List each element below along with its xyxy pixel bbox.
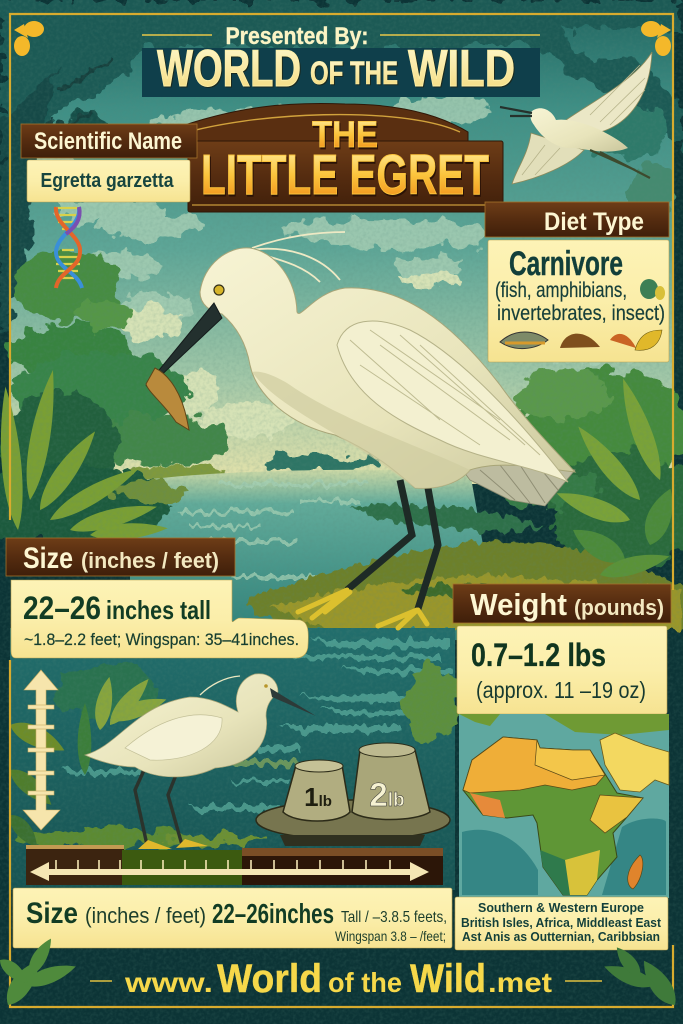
feet xyxy=(298,590,427,628)
icon: frog xyxy=(640,279,665,300)
lower leaves xyxy=(4,674,169,852)
left forest xyxy=(0,249,380,510)
scientific name panel: Egretta garzetta xyxy=(40,170,174,192)
river ripples xyxy=(170,482,370,579)
range map xyxy=(459,714,669,898)
diet panel: Diet Type xyxy=(544,208,644,236)
footer website: www. xyxy=(124,967,213,998)
diet panel: (fish, amphibians, xyxy=(495,279,627,302)
Africa xyxy=(463,737,643,895)
crest plumes xyxy=(248,232,345,282)
bottom size panel: Wingspan 3.8 – /feet; xyxy=(335,928,446,944)
flying egret xyxy=(500,52,652,184)
tail feathers xyxy=(480,465,558,503)
diet panel: Carnivore xyxy=(509,245,623,283)
beak xyxy=(146,303,222,386)
bottom size panel: Size xyxy=(26,897,78,930)
near shore foliage xyxy=(0,463,190,547)
region caption: British Isles, Africa, Middleast East xyxy=(461,915,662,930)
icon: frog on ground xyxy=(560,334,600,348)
diet panel xyxy=(485,202,669,362)
water bands xyxy=(60,640,450,811)
lower water xyxy=(10,628,455,890)
wing feathers xyxy=(350,330,540,455)
legs xyxy=(347,480,438,612)
body and neck xyxy=(200,248,575,488)
size panel: inches tall xyxy=(106,595,211,625)
footer leaves left xyxy=(0,935,78,1010)
region caption: Ast Anis as Outternian, Caribbsian xyxy=(462,929,660,944)
region caption: Southern & Western Europe xyxy=(478,900,644,915)
icon: fish xyxy=(500,332,548,349)
header: WILD xyxy=(408,40,515,98)
bottom size panel xyxy=(13,888,452,948)
icon: height arrow xyxy=(23,670,60,830)
lower foliage xyxy=(15,664,458,848)
header: Presented By: xyxy=(226,23,368,50)
size panel: ~1.8–2.2 feet; Wingspan: 35–41inches. xyxy=(24,630,299,649)
river xyxy=(130,470,500,640)
weight panel: (pounds) xyxy=(574,595,664,620)
right bushes xyxy=(500,370,683,570)
title sign: THE xyxy=(312,114,378,155)
weight panel: Weight xyxy=(470,587,567,622)
footer website: Wild xyxy=(410,957,486,1001)
corner ornament right xyxy=(641,21,671,56)
Madagascar xyxy=(628,855,643,889)
size panel: (inches / feet) xyxy=(81,548,219,573)
header: OF THE xyxy=(310,55,398,91)
size panel xyxy=(6,538,308,658)
fish xyxy=(146,368,189,430)
wing xyxy=(337,321,568,482)
top dark forest xyxy=(0,0,683,330)
footer leaves right xyxy=(601,943,682,1011)
clouds xyxy=(30,96,660,364)
weight panel: 0.7–1.2 lbs xyxy=(471,637,606,673)
title sign: LITTLE EGRET xyxy=(201,143,489,207)
header xyxy=(142,23,540,98)
icon: weights on plate xyxy=(256,743,450,846)
scientific name panel xyxy=(21,124,197,202)
pale clouds near horizon xyxy=(116,273,460,438)
size panel: 22–26 xyxy=(23,590,101,626)
eye xyxy=(214,285,224,295)
size panel: Size xyxy=(23,542,73,575)
small egret xyxy=(85,674,316,849)
tail xyxy=(440,440,575,506)
bottom size panel: Tall / –3.8.5 feets, xyxy=(341,909,447,926)
footer website xyxy=(90,957,602,1001)
icon: insect and leaf xyxy=(610,330,662,350)
Arabia xyxy=(600,733,669,792)
icon: DNA helix xyxy=(56,207,82,288)
right plants xyxy=(553,375,681,583)
scientific name panel: Scientific Name xyxy=(34,128,182,155)
footer website: .met xyxy=(488,967,552,998)
weight panel xyxy=(453,584,671,714)
icon: weights on plate: 1lb xyxy=(304,782,332,812)
bottom size panel: (inches / feet) xyxy=(85,903,206,928)
corner ornament left xyxy=(14,21,44,56)
footer website: World xyxy=(217,957,322,1001)
ruler bar xyxy=(26,845,443,885)
bank xyxy=(245,504,683,630)
weight panel: (approx. 11 –19 oz) xyxy=(476,677,646,703)
left plants xyxy=(0,368,168,542)
header: WORLD xyxy=(157,40,301,98)
icon: weights on plate: 2lb xyxy=(369,776,405,813)
body shadow xyxy=(252,372,470,488)
title sign xyxy=(170,103,503,212)
region caption xyxy=(455,897,668,950)
bottom size panel: 22–26inches xyxy=(212,898,334,929)
main egret xyxy=(146,232,575,628)
footer website: of the xyxy=(328,967,402,998)
